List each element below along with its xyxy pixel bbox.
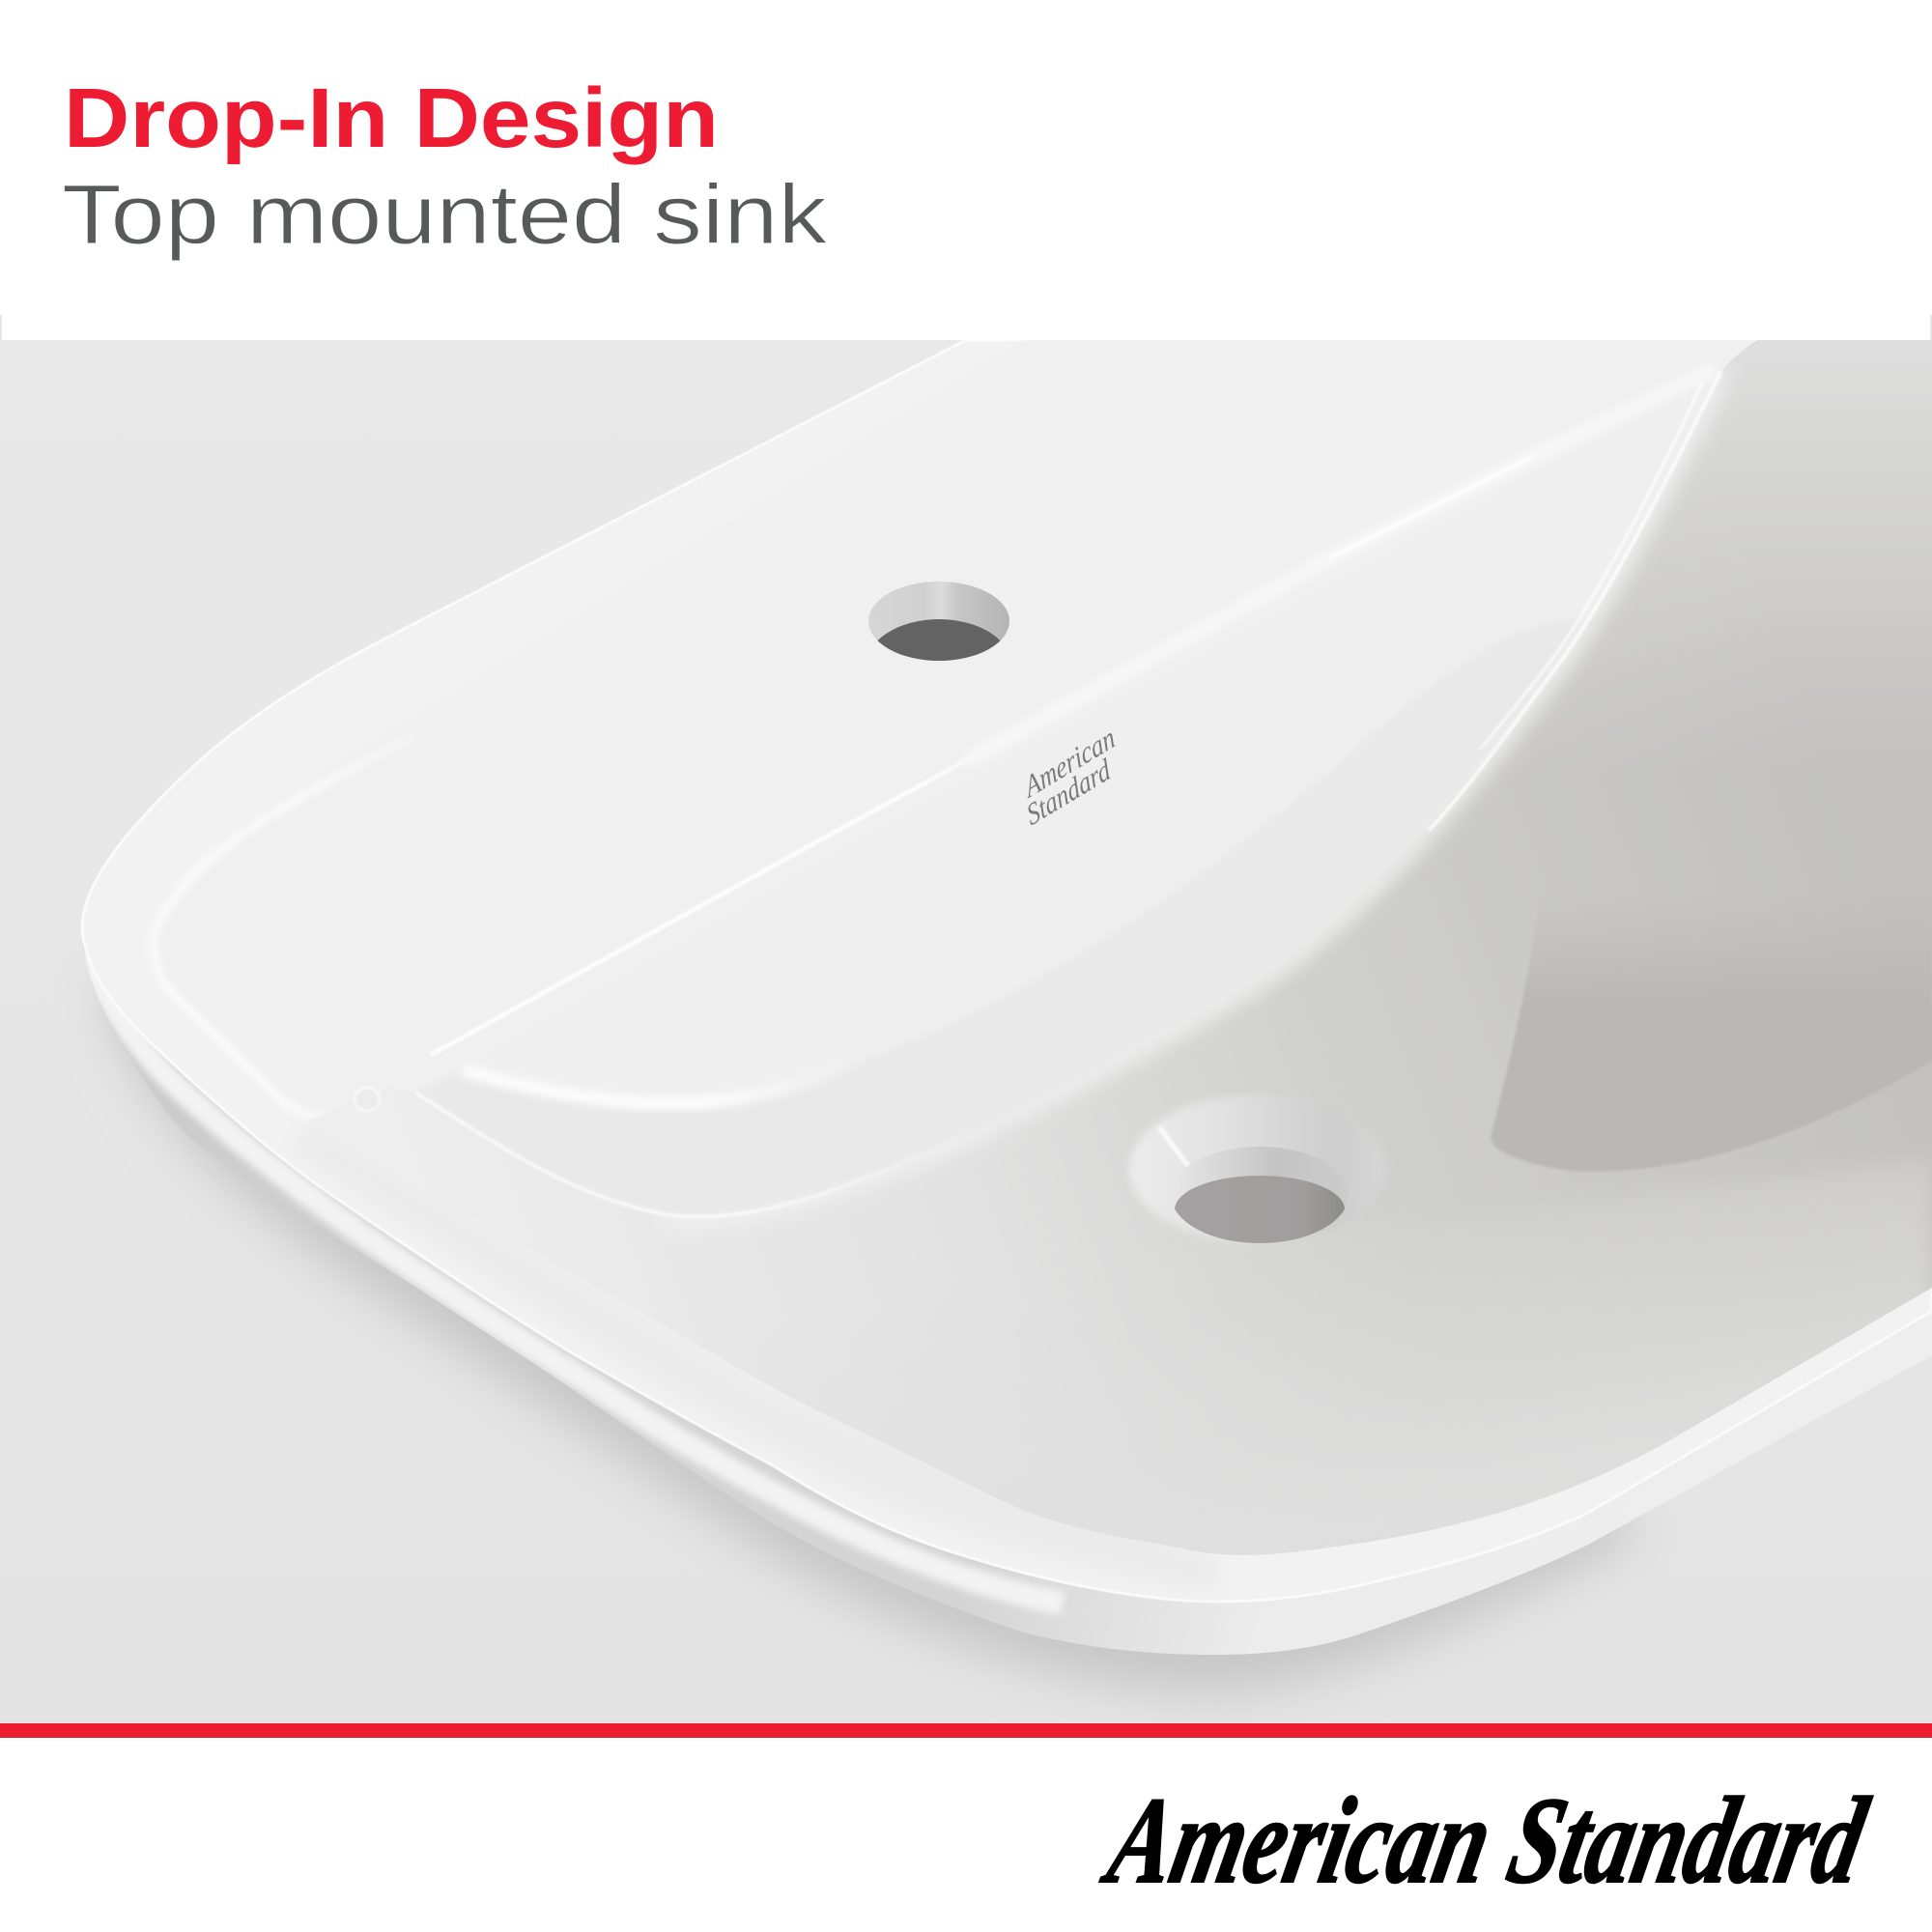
engraved word: Standard: Standard	[1023, 752, 1115, 833]
crease soft band	[966, 369, 1715, 761]
rim corner droplet	[355, 1088, 380, 1111]
photo top notches	[0, 315, 1932, 340]
sink rim top	[82, 340, 1932, 1602]
basin shading layers	[817, 340, 1932, 1548]
hole depth	[866, 619, 1012, 714]
sink cast shadow	[97, 976, 1642, 1691]
deck inner highlight	[155, 734, 415, 1119]
basin edge highlight, lower	[416, 1094, 794, 1217]
basin lower light	[1308, 1167, 1932, 1548]
basin edge highlight	[1429, 371, 1721, 831]
engraved word: American: American	[1019, 720, 1119, 806]
crease highlight, main	[431, 762, 963, 1055]
basin soft upper edge glow	[861, 375, 1727, 1186]
shelf white glow	[464, 1066, 789, 1111]
rim shading along the front	[290, 1121, 1216, 1594]
shelf lower band	[415, 618, 1584, 1216]
basin reflected shadow	[1491, 943, 1931, 1173]
drain inner cone	[1171, 1147, 1349, 1243]
sink outer edge band	[83, 945, 1932, 1655]
basin edge highlight, second line	[1480, 383, 1702, 750]
heading: Drop-In Design: Drop-In Design	[64, 71, 719, 165]
drain cone highlight	[1159, 1127, 1188, 1166]
red divider bar	[0, 1723, 1932, 1738]
basin upper light	[1605, 340, 1932, 661]
crease highlight, far	[1329, 457, 1532, 558]
band bright upper strip	[85, 952, 1063, 1604]
engraved logo on sink	[1019, 720, 1119, 833]
sink deck	[1026, 341, 1752, 342]
hole wall	[868, 582, 1009, 661]
shelf between crease and basin	[415, 371, 1721, 1216]
faucet hole	[866, 582, 1012, 714]
panel: sink photo	[0, 340, 1932, 1723]
subheading: Top mounted sink: Top mounted sink	[62, 168, 828, 262]
countertop	[0, 340, 1932, 1723]
basin	[309, 340, 1932, 1555]
drain opening	[1175, 1176, 1345, 1243]
drain	[1129, 1094, 1386, 1243]
drain outer cone	[1129, 1094, 1386, 1243]
